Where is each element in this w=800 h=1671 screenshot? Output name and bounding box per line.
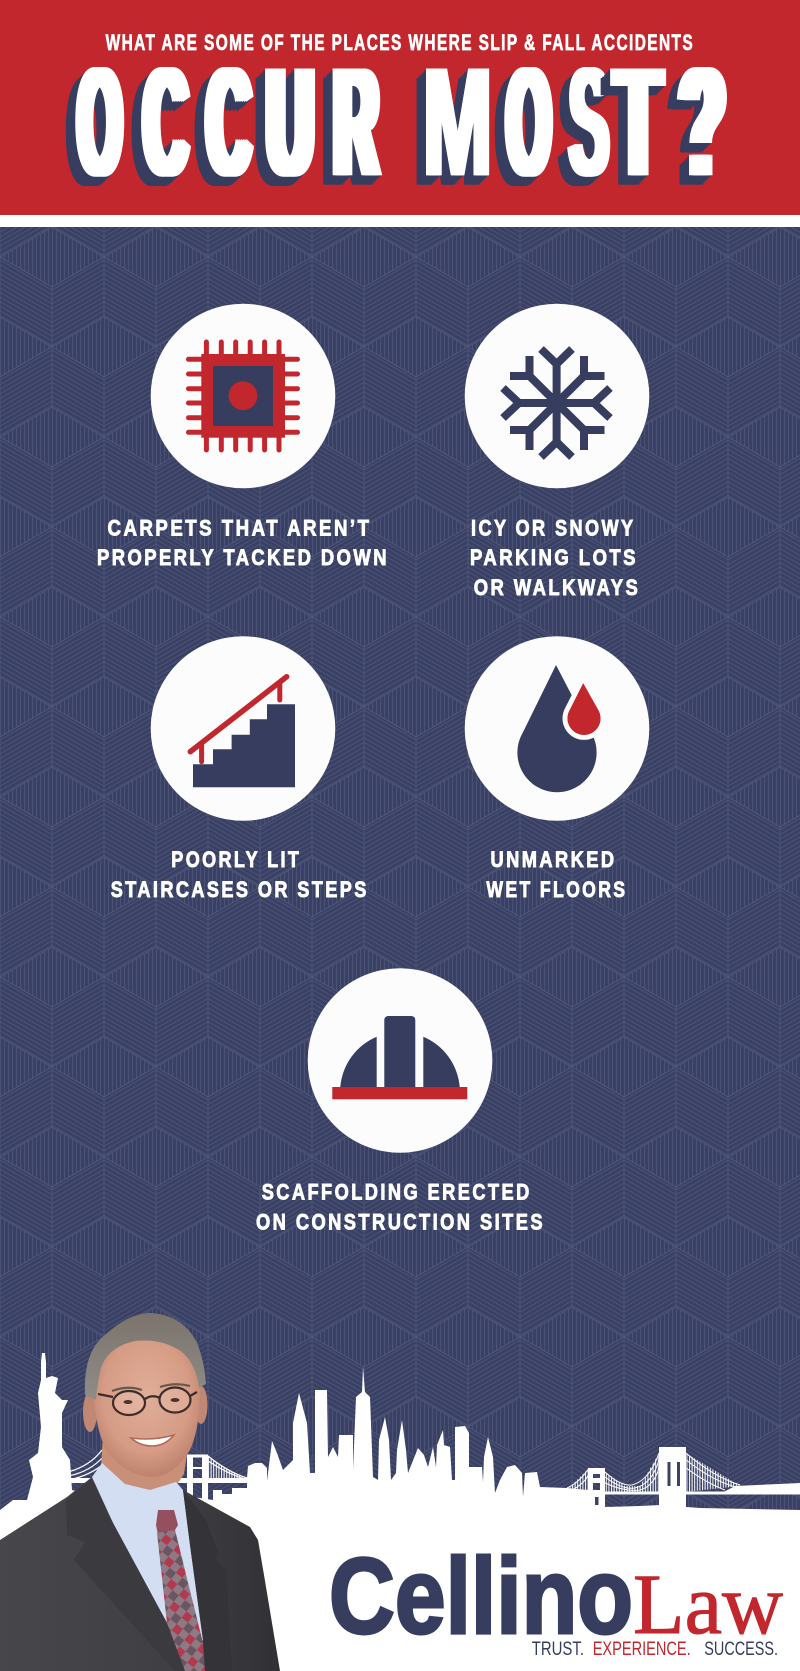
label: snow: PARKING LOTS <box>470 545 638 570</box>
logo: Cellino Law: Law <box>633 1556 783 1652</box>
logo: Cellino Law: Cellino <box>329 1535 633 1656</box>
label: snow: ICY OR SNOWY <box>471 516 636 540</box>
ears <box>83 1392 97 1432</box>
tagline: EXPERIENCE. <box>593 1638 691 1660</box>
panel: scaffolding <box>256 968 545 1234</box>
title: OCCUR MOST?: O <box>78 35 122 209</box>
icon: staircase <box>151 636 335 821</box>
title: OCCUR MOST?: U <box>267 35 314 209</box>
label: carpets <box>97 516 389 570</box>
tie <box>156 1510 205 1671</box>
portrait of attorney <box>0 1313 280 1671</box>
tagline: TRUST. <box>532 1638 584 1660</box>
label: carpets: CARPETS THAT AREN’T <box>108 516 372 540</box>
label: wet floors <box>486 847 627 902</box>
icon: water drops <box>465 636 649 821</box>
label: stairs: STAIRCASES OR STEPS <box>111 877 369 902</box>
title: OCCUR MOST?: R <box>334 35 378 209</box>
face <box>93 1336 200 1477</box>
label: carpets: PROPERLY TACKED DOWN <box>97 545 389 570</box>
icon: hard hat <box>308 968 492 1153</box>
left bridge <box>68 1450 247 1500</box>
neck <box>101 1435 190 1498</box>
panel: stairs <box>111 636 369 902</box>
label: snow: OR WALKWAYS <box>474 575 640 600</box>
label: scaffolding: ON CONSTRUCTION SITES <box>256 1209 545 1234</box>
header band <box>0 0 800 227</box>
label: stairs: POORLY LIT <box>171 847 301 872</box>
title: OCCUR MOST?: C <box>207 35 250 209</box>
label: wet floors: WET FLOORS <box>486 877 627 902</box>
shirt <box>92 1463 203 1671</box>
label: wet floors: UNMARKED <box>490 847 616 872</box>
label: stairs <box>111 847 369 902</box>
smile <box>131 1435 174 1446</box>
panel: wet floors <box>465 636 649 902</box>
label: snow <box>470 516 640 600</box>
eyebrows <box>112 1384 190 1391</box>
icon: snowflake <box>465 304 649 488</box>
tagline <box>532 1638 778 1660</box>
city skyline silhouette <box>0 1353 800 1671</box>
label: scaffolding <box>256 1179 545 1234</box>
title: OCCUR MOST?: S <box>569 35 609 209</box>
title: OCCUR MOST?: ? <box>680 35 724 209</box>
icon: carpet chip <box>151 304 335 488</box>
title: OCCUR MOST?: T <box>614 35 662 209</box>
panel: carpets <box>97 304 389 570</box>
eyes <box>124 1398 180 1404</box>
lapels <box>66 1478 232 1671</box>
label: scaffolding: SCAFFOLDING ERECTED <box>262 1179 532 1204</box>
hair <box>85 1313 206 1400</box>
title: OCCUR MOST?: C <box>144 35 187 209</box>
panel: snow <box>465 304 649 600</box>
right bridges <box>565 1447 800 1508</box>
glasses <box>98 1388 197 1415</box>
suit <box>0 1477 280 1671</box>
title: OCCUR MOST?: M <box>423 35 492 209</box>
title: OCCUR MOST? <box>66 35 727 209</box>
title: OCCUR MOST?: O <box>506 35 550 209</box>
